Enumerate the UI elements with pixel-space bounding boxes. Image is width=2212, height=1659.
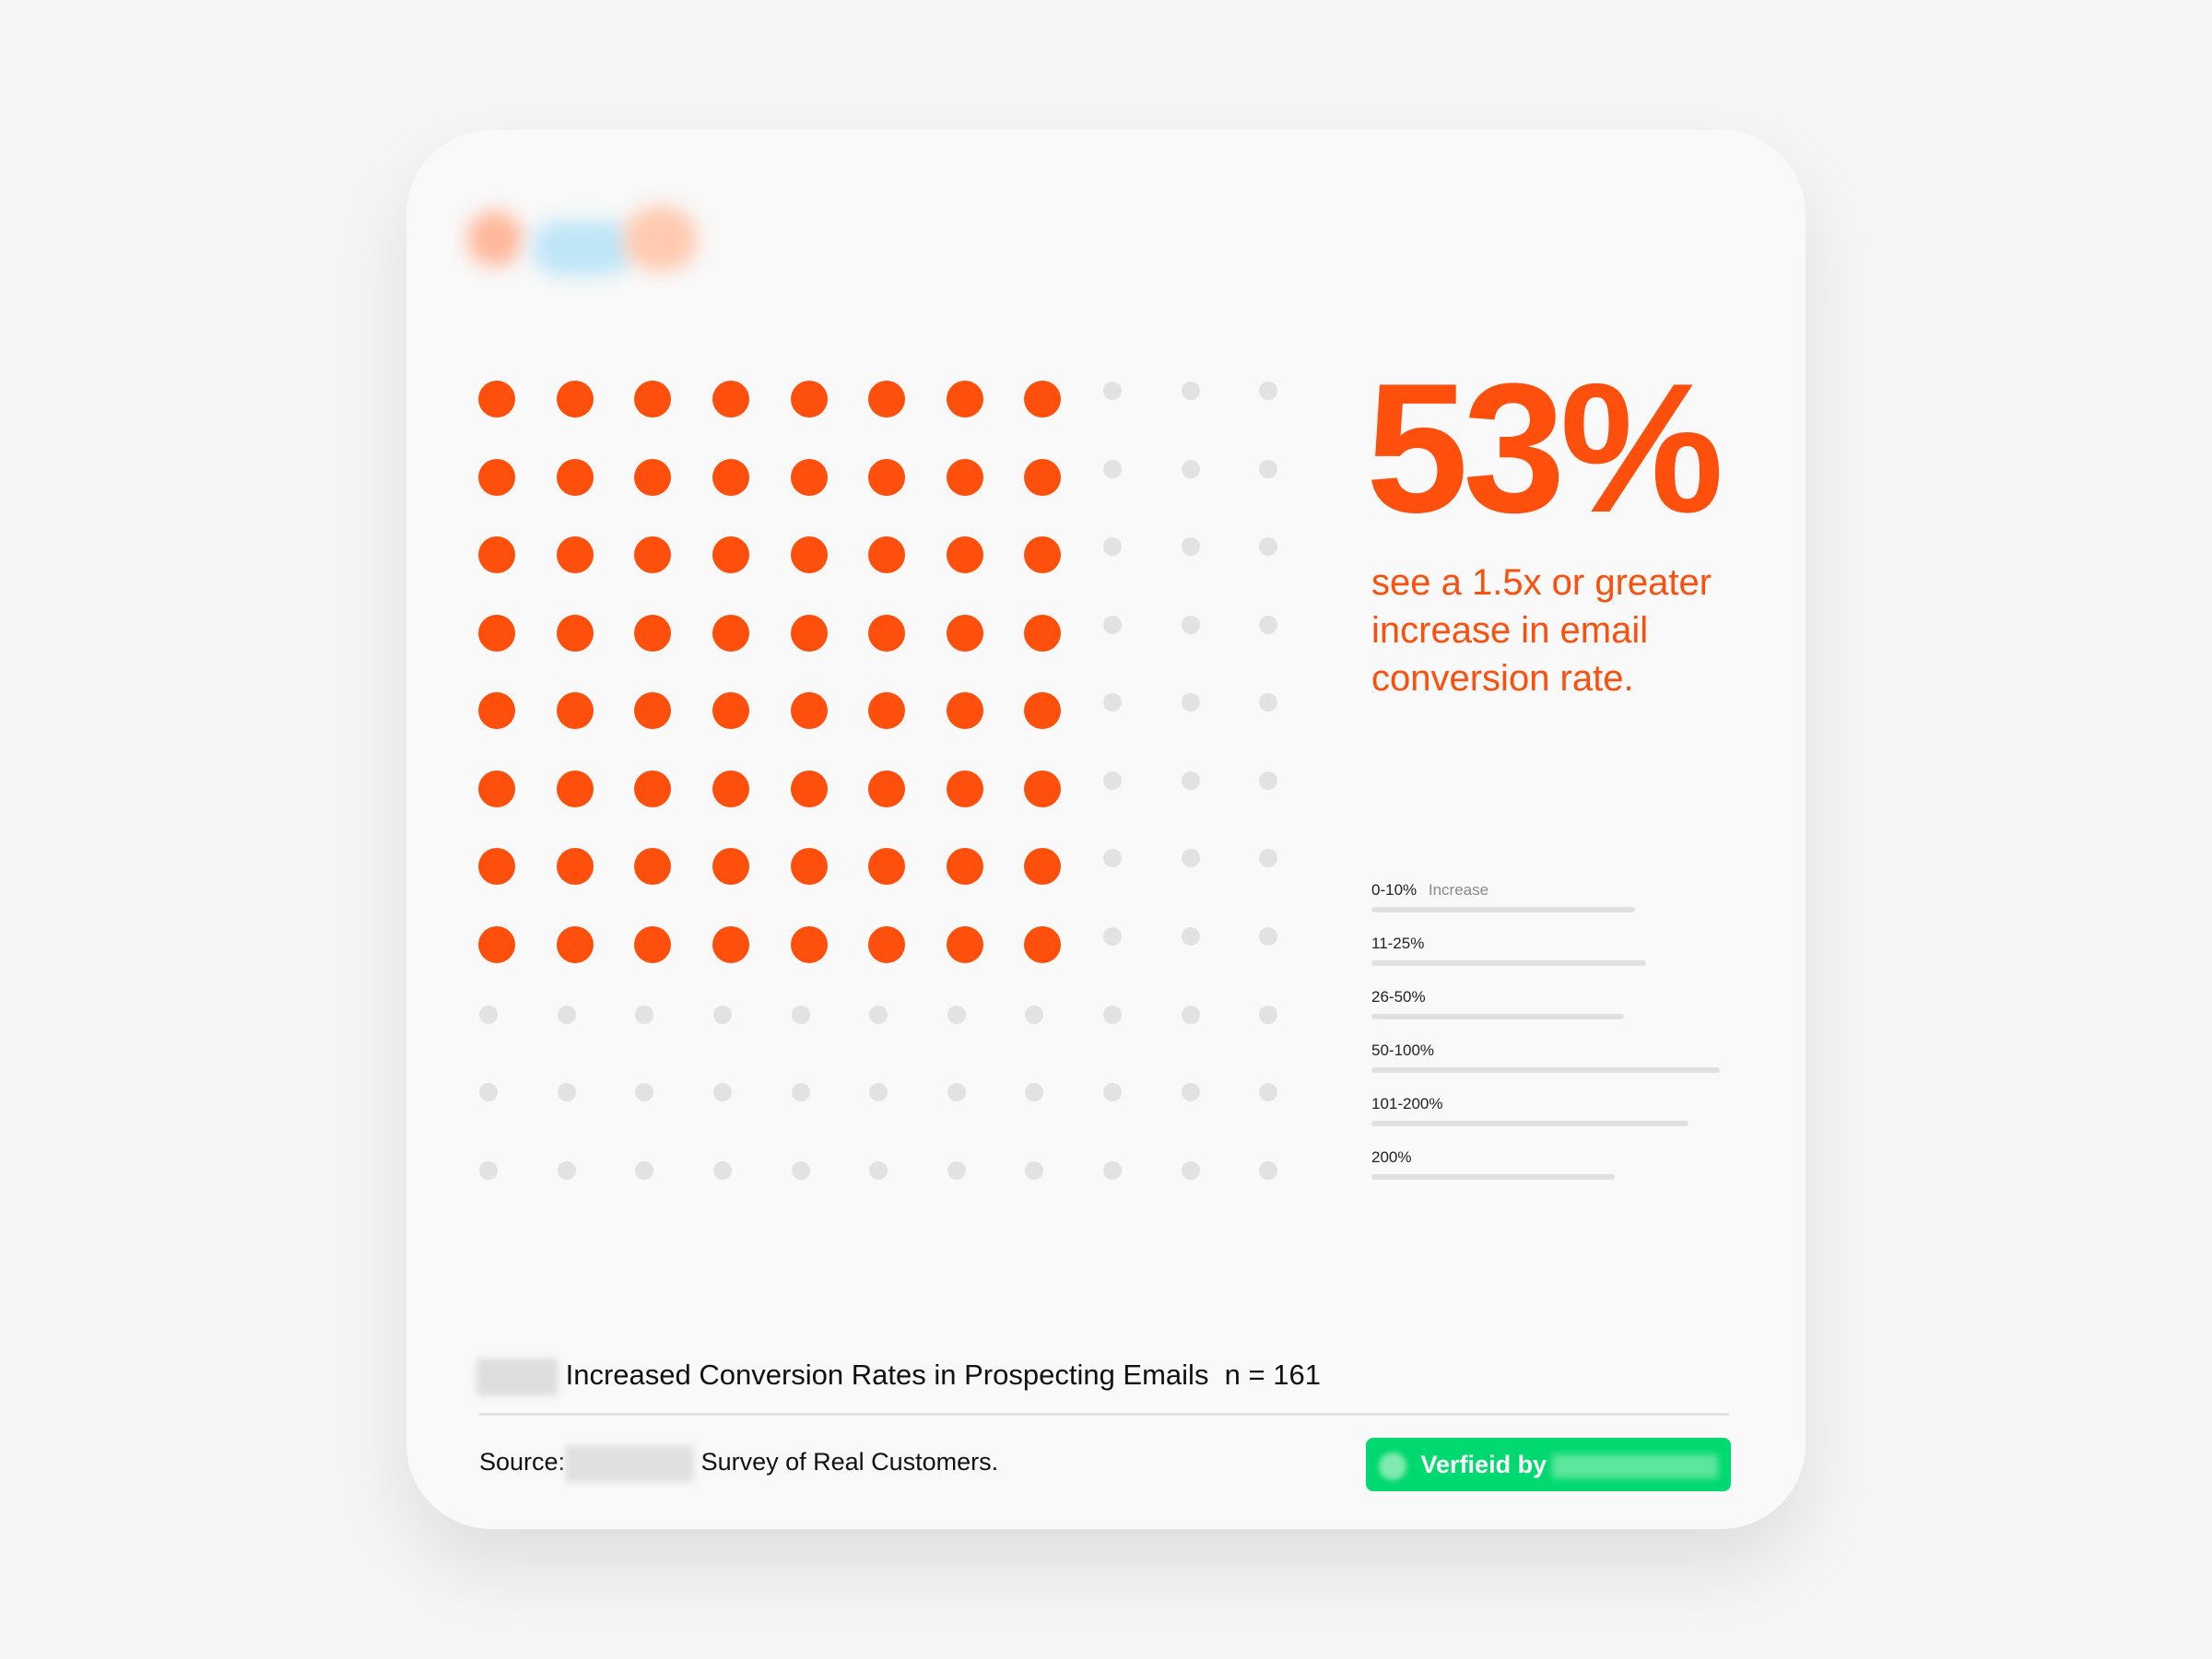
source line: Source: Survey of Real Customers. xyxy=(479,1448,998,1476)
bar: 200% xyxy=(1371,1148,1615,1180)
verified badge: Verfieid by xyxy=(1421,1451,1547,1478)
bar: 0-10% xyxy=(1371,881,1635,912)
divider xyxy=(479,1413,1729,1416)
bar list xyxy=(1371,881,1720,1180)
source line xyxy=(479,1443,998,1484)
bar: 101-200% xyxy=(1371,1095,1688,1126)
stat description: see a 1.5x or greater increase in email conversion rate. xyxy=(1371,562,1712,699)
chart title: Increased Conversion Rates in Prospecting Emails n = 161 xyxy=(566,1359,1321,1391)
bar: 101-200%: 101-200% xyxy=(1371,1095,1443,1112)
bar: 26-50% xyxy=(1371,988,1624,1019)
bar: 0-10%: 0-10% Increase xyxy=(1371,881,1488,899)
verified badge xyxy=(1366,1438,1731,1491)
logo (blurred) xyxy=(455,195,708,286)
card panel xyxy=(406,130,1806,1529)
chart title xyxy=(475,1357,1321,1397)
bar: 50-100% xyxy=(1371,1041,1720,1073)
bar: 11-25%: 11-25% xyxy=(1371,935,1424,952)
big stat 53%: 53% xyxy=(1366,346,1718,551)
bar: 26-50%: 26-50% xyxy=(1371,988,1426,1006)
bar: 11-25% xyxy=(1371,935,1646,966)
bar: 200%: 200% xyxy=(1371,1148,1411,1166)
bar: 50-100%: 50-100% xyxy=(1371,1041,1434,1059)
dot matrix: 53 of 100 xyxy=(478,381,1277,1180)
